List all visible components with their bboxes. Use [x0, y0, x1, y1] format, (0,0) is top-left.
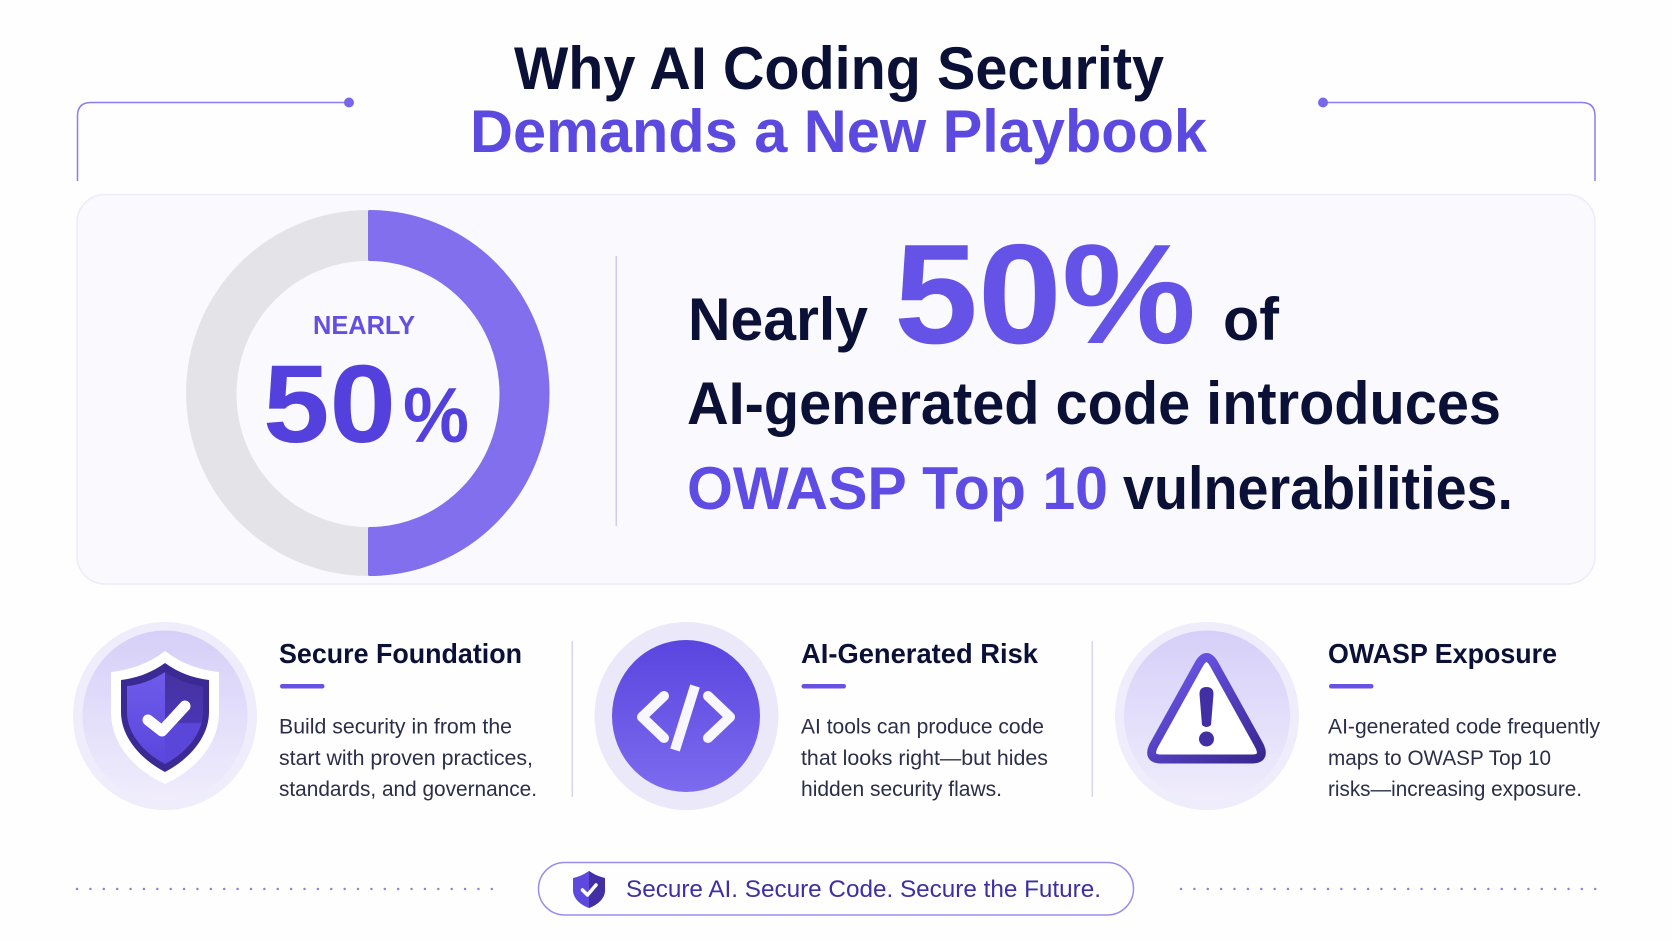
statement text: OWASP Top 10 [687, 455, 1108, 522]
panel: key statistic [77, 194, 1595, 584]
right header bracket [1318, 98, 1595, 181]
heading: OWASP Exposure [1328, 638, 1557, 669]
description [1328, 714, 1600, 801]
statement text: vulnerabilities. [1123, 455, 1513, 522]
accent rule [280, 684, 324, 688]
description: start with proven practices, [279, 746, 533, 770]
donut label: NEARLY [313, 310, 415, 340]
description [801, 714, 1048, 801]
heading: AI-Generated Risk [801, 638, 1039, 669]
heading: Secure Foundation [279, 638, 522, 669]
description: risks—increasing exposure. [1328, 777, 1582, 801]
right dotted line [1181, 888, 1597, 890]
description: standards, and governance. [279, 777, 537, 801]
donut label [263, 310, 469, 466]
statement text: AI-generated code introduces [687, 370, 1501, 437]
description [279, 714, 537, 801]
title: Why AI Coding Security [514, 35, 1165, 102]
statement text [687, 215, 1513, 522]
title [470, 35, 1208, 165]
title: Demands a New Playbook [470, 98, 1208, 165]
accent rule [802, 684, 846, 688]
icon: code brackets [594, 622, 778, 810]
description: AI tools can produce code [801, 714, 1044, 738]
footer pill [538, 862, 1134, 915]
icon: shield with check [73, 622, 257, 810]
slogan: Secure AI. Secure Code. Secure the Future. [626, 876, 1101, 903]
accent rule [1329, 684, 1374, 688]
card: OWASP exposure [1115, 622, 1600, 810]
description: hidden security flaws. [801, 777, 1002, 801]
donut label: 50 [263, 343, 396, 466]
statement text: of [1223, 286, 1280, 353]
icon: warning triangle [1115, 622, 1299, 810]
card: secure foundation [73, 622, 537, 810]
icon: small shield [573, 871, 605, 908]
left dotted line [77, 888, 494, 890]
statement text: Nearly [688, 286, 869, 353]
description: Build security in from the [279, 714, 512, 738]
statement text: 50% [894, 215, 1196, 374]
donut label: % [403, 371, 469, 459]
description: that looks right—but hides [801, 746, 1048, 770]
left header bracket [78, 98, 354, 181]
card: AI-generated risk [594, 622, 1048, 810]
description: maps to OWASP Top 10 [1328, 746, 1551, 770]
description: AI-generated code frequently [1328, 714, 1600, 738]
donut chart: nearly 50% [186, 210, 548, 576]
